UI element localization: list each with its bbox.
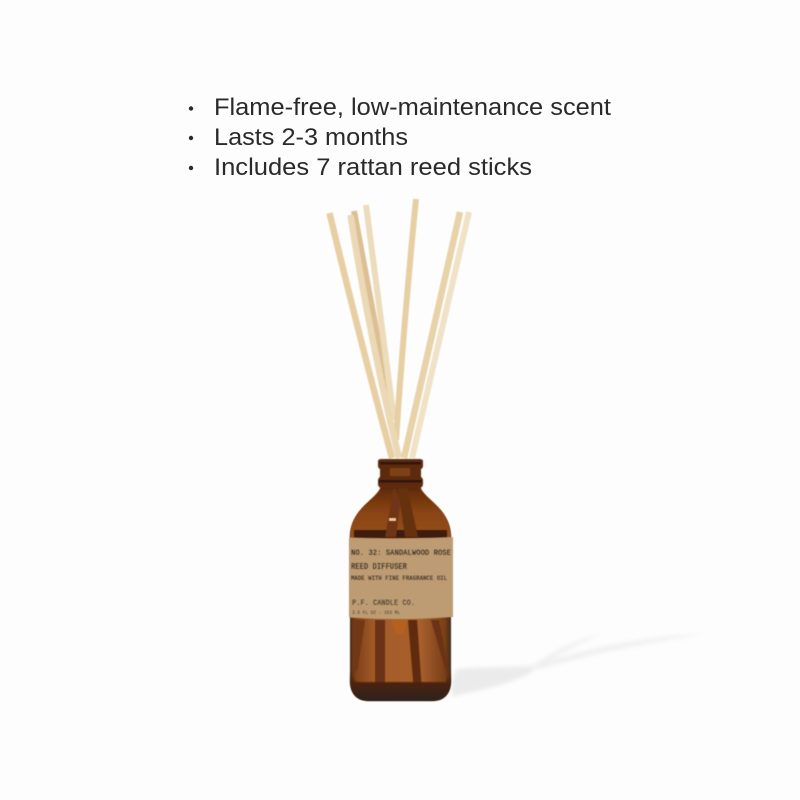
bullet item: reed sticks: Includes 7 rattan reed sticks: [214, 154, 532, 181]
bullet item: lasts: Lasts 2-3 months: [214, 124, 408, 151]
label line: scent name: NO. 32: SANDALWOOD ROSE: [351, 549, 451, 558]
kraft label: [349, 537, 453, 619]
bullet item: flame-free: Flame-free, low-maintenance scent: [214, 94, 611, 121]
cast shadow: [452, 634, 705, 696]
label line: brand: P.F. CANDLE CO.: [352, 598, 415, 608]
bottle neck: [378, 459, 423, 488]
label line: volume: 3.5 FL OZ - 103 ML: [352, 609, 401, 616]
reed 5: [396, 199, 416, 440]
bottle: [349, 459, 453, 701]
bottle base: [350, 670, 451, 701]
reed 6: [404, 212, 460, 458]
bullet list: [189, 94, 611, 181]
reed 7: [412, 212, 469, 458]
reed 1: [330, 213, 392, 458]
reeds: [330, 199, 469, 458]
reed 2: [350, 215, 399, 458]
label line: product: REED DIFFUSER: [351, 562, 407, 572]
bottle body: [350, 486, 451, 701]
reed 3: [354, 211, 393, 420]
reed 4: [366, 205, 394, 420]
label line: fragrance: MADE WITH FINE FRAGRANCE OIL: [351, 575, 447, 582]
shoulder shading: [350, 487, 451, 538]
liquid line: [354, 530, 447, 538]
submerged reeds upper: [385, 486, 418, 537]
glass highlight: [389, 518, 396, 521]
submerged reeds lower: [353, 620, 449, 692]
